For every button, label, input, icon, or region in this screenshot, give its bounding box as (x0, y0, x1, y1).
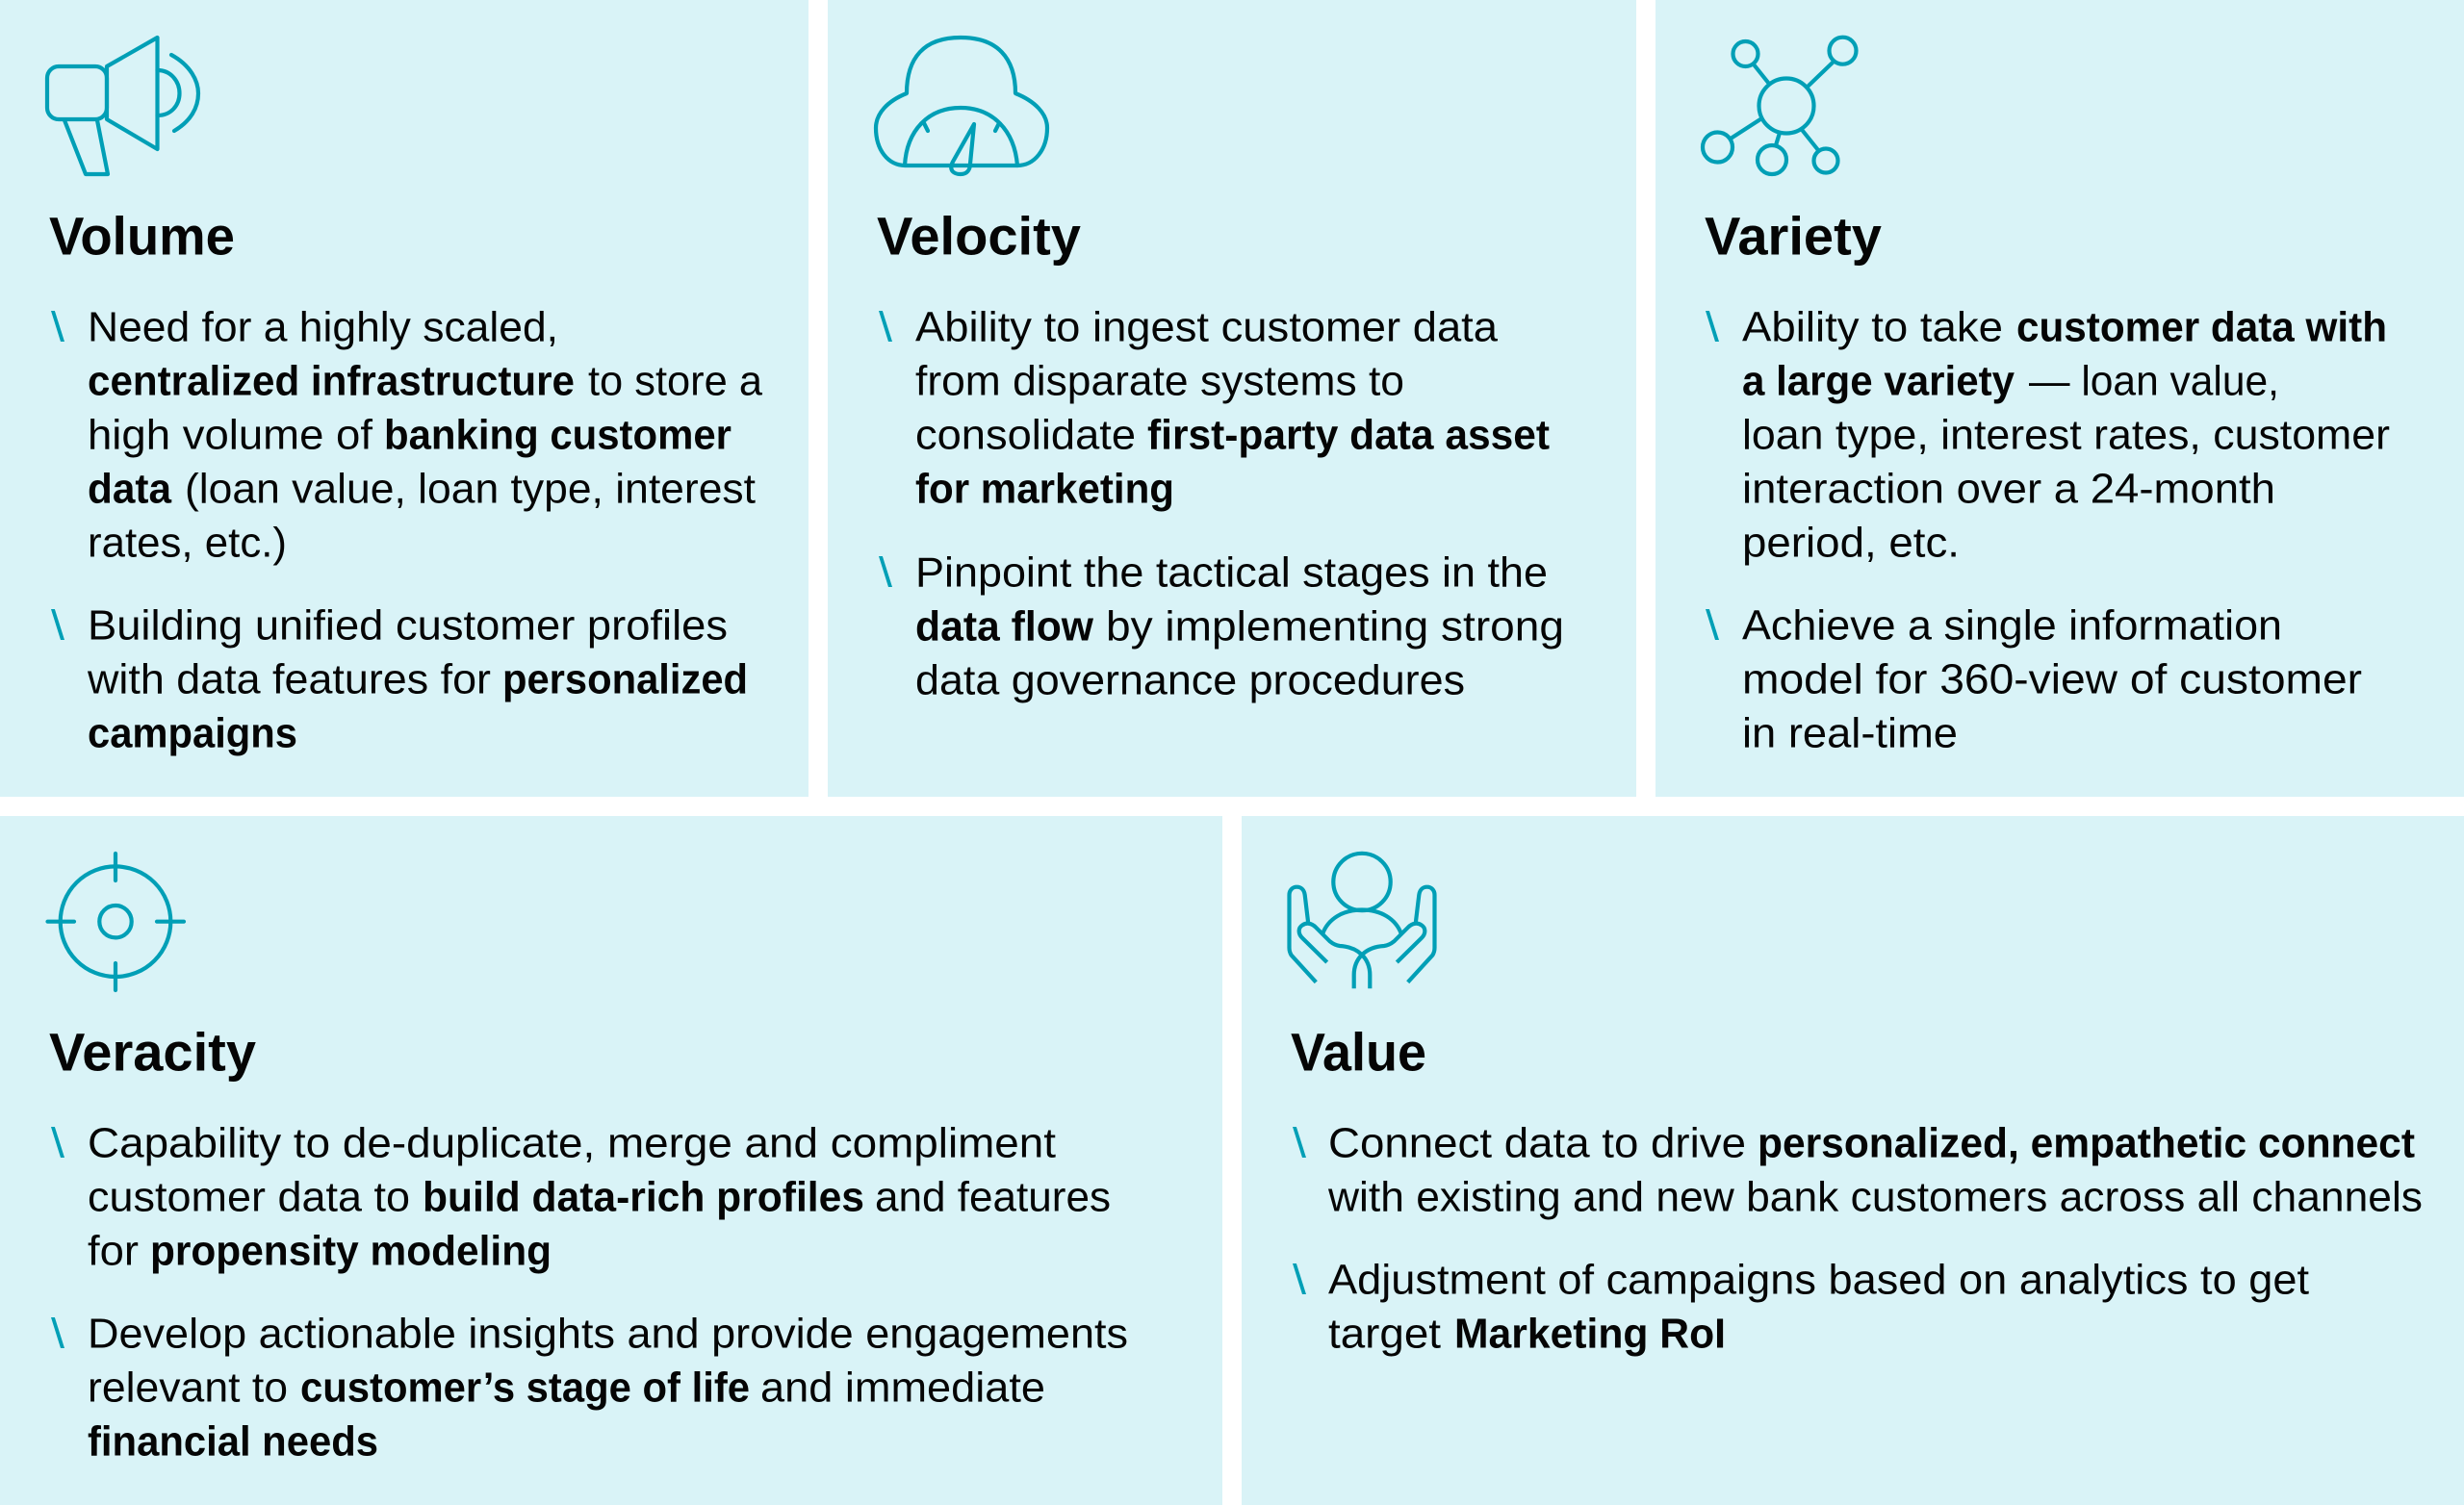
text block: Veracity bullet 1: build data-rich profiles (423, 1174, 864, 1220)
text block: Volume bullet 2: \ (51, 602, 65, 649)
text block: Volume bullet 1: Need for a highly scaled, (88, 304, 558, 350)
text block: Variety bullet 1: period, etc. (1742, 520, 1960, 566)
text block: Veracity bullet 1: propensity modeling (150, 1228, 552, 1274)
text block: Volume bullet 2: personalized (502, 656, 748, 702)
text block: Variety bullet 1: loan type, interest rates, customer (1742, 412, 2390, 458)
text block: Velocity bullet 1 (879, 304, 1550, 512)
text block: Veracity bullet 2: financial needs (88, 1418, 378, 1465)
text block: Variety bullet 2: in real-time (1742, 710, 1958, 756)
text block: Variety bullet 1: \ (1706, 304, 1720, 350)
text block: Veracity bullet 2: \ (51, 1311, 65, 1357)
text block: Velocity bullet 2: by implementing strong (1106, 602, 1564, 650)
text block: Velocity bullet 1: from disparate systems to (915, 358, 1404, 404)
text block: Volume bullet 1: high volume of (88, 412, 373, 458)
panel: Velocity (828, 0, 1636, 797)
text block: Veracity bullet 2: relevant to (88, 1365, 288, 1411)
heading: Velocity: Velocity (877, 206, 1081, 266)
text block: Value bullet 1: with existing and new bank customers across all channels (1327, 1174, 2423, 1220)
text block: Velocity bullet 1: \ (879, 304, 893, 350)
panel background: Variety (1656, 0, 2464, 797)
text block: Value bullet 2: Adjustment of campaigns based on analytics to get (1328, 1257, 2309, 1303)
icon: megaphone (47, 38, 198, 174)
panel: Veracity (0, 816, 1222, 1505)
text block: Veracity bullet 2: customer’s stage of life (300, 1365, 750, 1411)
text block: Velocity bullet 2: data flow (915, 602, 1094, 650)
text block: Veracity bullet 1: Capability to de-duplicate, merge and compliment (88, 1120, 1056, 1166)
text block: Value bullet 2: \ (1293, 1257, 1307, 1303)
text block: Velocity bullet 1: consolidate (915, 412, 1136, 458)
text block: Value bullet 2: Marketing RoI (1454, 1311, 1726, 1357)
heading: Veracity: Veracity (49, 1022, 256, 1082)
text block: Velocity bullet 1: first-party data asset (1147, 412, 1550, 458)
text block: Variety bullet 1: interaction over a 24-month (1742, 466, 2275, 512)
text block: Veracity bullet 2: Develop actionable insights and provide engagements (88, 1311, 1128, 1357)
panel: Value (1242, 816, 2464, 1505)
text block: Veracity bullet 1: customer data to (88, 1174, 410, 1220)
text block: Value bullet 1: personalized, empathetic connect (1758, 1120, 2415, 1166)
text block: Velocity bullet 2 (879, 548, 1564, 704)
text block: Volume bullet 1: rates, etc.) (88, 520, 287, 566)
text block: Variety bullet 2 (1706, 602, 2362, 756)
text block: Veracity bullet 1: for (88, 1228, 139, 1274)
panel: Volume (0, 0, 808, 797)
text block: Volume bullet 2 (51, 602, 748, 756)
panel background: Veracity (0, 816, 1222, 1505)
text block: Velocity bullet 2: \ (879, 548, 893, 597)
panel background: Volume (0, 0, 808, 797)
text block: Variety bullet 1: Ability to take (1742, 304, 2003, 350)
text block: Volume bullet 1: to store a (588, 358, 763, 404)
panel background: Value (1242, 816, 2464, 1505)
text block: Value bullet 1: \ (1293, 1120, 1307, 1166)
text block: Variety bullet 1: customer data with (2016, 304, 2387, 350)
text block: Variety bullet 1: — loan value, (2029, 358, 2279, 404)
text block: Variety bullet 2: Achieve a single information (1742, 602, 2282, 649)
text block: Value bullet 1 (1293, 1120, 2423, 1220)
icon: connected nodes (1703, 38, 1856, 174)
text block: Volume bullet 2: with data features for (87, 656, 491, 702)
icon: hands holding person (1290, 854, 1434, 988)
text block: Volume bullet 1 (51, 304, 763, 566)
text block: Volume bullet 1: banking customer (384, 412, 732, 458)
text block: Value bullet 1: Connect data to drive (1328, 1120, 1746, 1166)
text block: Veracity bullet 2 (51, 1311, 1128, 1465)
text block: Volume bullet 2: Building unified customer profiles (88, 602, 728, 649)
text block: Variety bullet 1 (1706, 304, 2390, 566)
text block: Volume bullet 1: \ (51, 304, 65, 350)
text block: Volume bullet 1: (loan value, loan type, interest (185, 466, 756, 512)
text block: Veracity bullet 2: and immediate (760, 1365, 1045, 1411)
text block: Velocity bullet 1: Ability to ingest customer data (915, 304, 1499, 350)
heading: Value: Value (1291, 1022, 1426, 1082)
text block: Veracity bullet 1: and features (875, 1174, 1111, 1220)
icon: cloud speedometer (876, 38, 1047, 174)
text block: Velocity bullet 2: data governance procedures (915, 656, 1465, 704)
text block: Variety bullet 2: \ (1706, 602, 1720, 649)
text block: Velocity bullet 2: Pinpoint the tactical stages in the (915, 548, 1548, 597)
panel: Variety (1656, 0, 2464, 797)
text block: Variety bullet 1: a large variety (1742, 358, 2015, 404)
text block: Variety bullet 2: model for 360-view of customer (1742, 656, 2362, 702)
icon: target crosshair (48, 854, 184, 990)
text block: Value bullet 2: target (1328, 1311, 1441, 1357)
text block: Velocity bullet 1: for marketing (915, 466, 1174, 512)
text block: Volume bullet 1: data (88, 466, 171, 512)
heading: Variety: Variety (1705, 206, 1882, 266)
text block: Volume bullet 2: campaigns (88, 710, 297, 756)
text block: Veracity bullet 1: \ (51, 1120, 65, 1166)
text block: Veracity bullet 1 (51, 1120, 1111, 1274)
text block: Value bullet 2 (1293, 1257, 2309, 1357)
panel background: Velocity (828, 0, 1636, 797)
heading: Volume: Volume (49, 206, 235, 266)
text block: Volume bullet 1: centralized infrastructure (88, 358, 575, 404)
